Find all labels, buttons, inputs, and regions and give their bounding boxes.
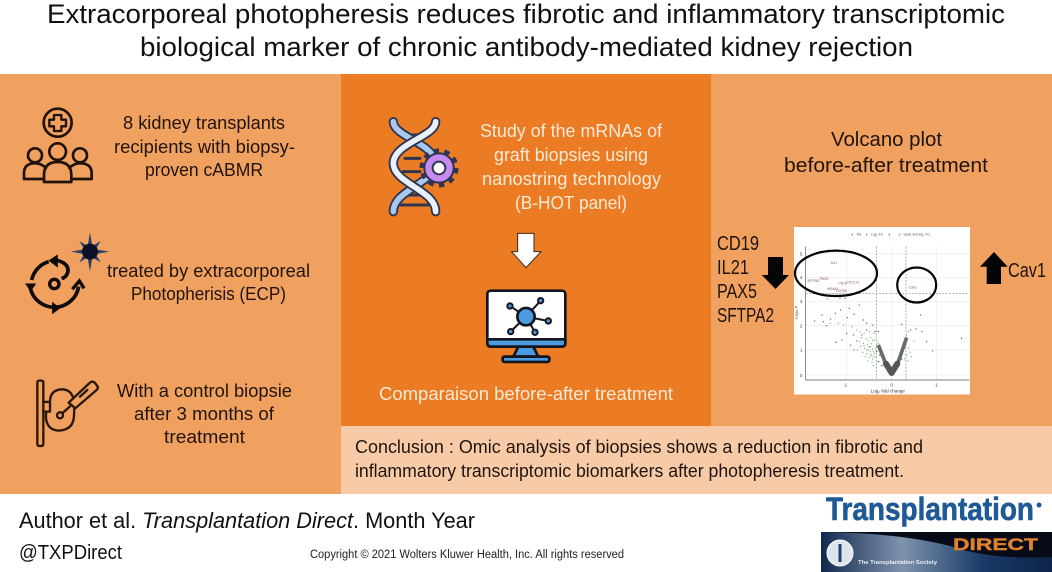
text: study description: (B-HOT panel): [515, 192, 627, 213]
chart: volcano plot: Log₂ fold change: [871, 389, 906, 394]
logo: Transplantation Direct: DIRECT: [953, 535, 1039, 554]
text: study description: Study of the mRNAs of: [480, 120, 663, 141]
text: downregulated genes: SFTPA2: [717, 305, 774, 327]
chart: volcano plot: Cav1: [909, 286, 917, 290]
text: control biopsy: [117, 380, 292, 447]
icon: circular treatment arrows: [26, 255, 84, 313]
text: study description: [480, 120, 663, 213]
chart: volcano plot: p - value and log₂ FC: [899, 233, 931, 237]
chart: volcano plot: 0: [800, 373, 803, 378]
icon: patient group: [24, 109, 92, 182]
chart: volcano plot: Log₂ FC: [871, 233, 884, 237]
panel: study: [341, 74, 711, 426]
chart: volcano plot: 5: [800, 252, 803, 257]
icon: DNA with gear: [393, 122, 456, 212]
chart: volcano plot: MS4A1: [827, 287, 838, 291]
title: biological marker of chronic antibody-mediated kidney rejection: [140, 32, 913, 62]
title: [47, 0, 1005, 62]
arrow: white down: [512, 233, 541, 268]
chart: volcano plot: 1: [935, 382, 938, 387]
chart: volcano plot: [794, 227, 970, 394]
chart: volcano plot: 3: [800, 299, 803, 304]
arrow: down black: [762, 257, 789, 289]
icon: computer with network: [487, 291, 565, 362]
icon: kidney biopsy: [37, 381, 98, 446]
arrow: up black: [980, 252, 1008, 284]
text: treatment: treated by extracorporeal: [107, 260, 310, 281]
icon: sun: [71, 232, 109, 272]
heading: volcano plot: Volcano plot: [831, 128, 942, 151]
chart: volcano plot: -1: [843, 382, 848, 387]
text: comparison: Comparaison before-after treatment: [379, 383, 673, 404]
text: copyright: Copyright © 2021 Wolters Kluwer Health, Inc. All rights reserved: [310, 549, 624, 561]
text: recipients: proven cABMR: [145, 159, 263, 180]
text: treatment: [107, 260, 310, 304]
text: study description: graft biopsies using: [494, 144, 648, 165]
text: downregulated genes: PAX5: [717, 281, 757, 303]
heading: volcano plot: before-after treatment: [784, 154, 988, 177]
text: study description: nanostring technology: [482, 168, 662, 189]
text: treatment: Photopherisis (ECP): [131, 283, 286, 304]
text: conclusion: inflammatory transcriptomic biomarkers after photopheresis treatment.: [355, 460, 904, 481]
chart: volcano plot: CXCL13: [847, 281, 859, 285]
logo: Transplantation Direct: [821, 491, 1052, 572]
text: control biopsy: With a control biopsie: [117, 380, 292, 401]
text: downregulated genes: CD19: [717, 233, 759, 255]
chart: volcano plot: PAX5: [820, 277, 828, 281]
text: control biopsy: treatment: [164, 426, 245, 447]
chart: volcano plot: 2: [800, 323, 803, 328]
heading: volcano plot: [784, 128, 988, 177]
chart: volcano plot: 4: [800, 275, 803, 280]
callout: downregulated circle: [795, 251, 877, 296]
text: recipients: 8 kidney transplants: [123, 112, 285, 133]
callout: upregulated circle: [897, 268, 936, 302]
text: handle: @TXPDirect: [19, 542, 122, 564]
text: conclusion: Conclusion : Omic analysis of biopsies shows a reduction in fibrotic and: [355, 436, 923, 457]
chart: volcano plot: NS: [857, 233, 862, 237]
chart: volcano plot: CD79A: [836, 289, 847, 293]
text: citation: Author et al. Transplantation Direct. Month Year: [19, 508, 475, 533]
text: downregulated genes: [717, 233, 774, 327]
text: control biopsy: after 3 months of: [134, 403, 275, 424]
chart: volcano plot: IL21: [831, 261, 837, 265]
panel: volcano plot: [711, 74, 1052, 426]
text: downregulated genes: IL21: [717, 257, 749, 279]
chart: volcano plot: -Log₁₀ P: [794, 305, 799, 320]
panel: patients: [0, 74, 341, 494]
chart: volcano plot: 0: [890, 382, 893, 387]
text: recipients: recipients with biopsy-: [114, 136, 295, 157]
chart: volcano plot: 1: [800, 348, 803, 353]
chart: volcano plot: CD19: [838, 282, 847, 286]
logo: Transplantation Direct: The Transplantation Society: [858, 560, 938, 566]
panel: conclusion: [341, 426, 1052, 494]
chart: volcano plot: SFTPA2: [807, 279, 820, 283]
text: recipients: [114, 112, 295, 180]
text: conclusion: [355, 436, 923, 481]
